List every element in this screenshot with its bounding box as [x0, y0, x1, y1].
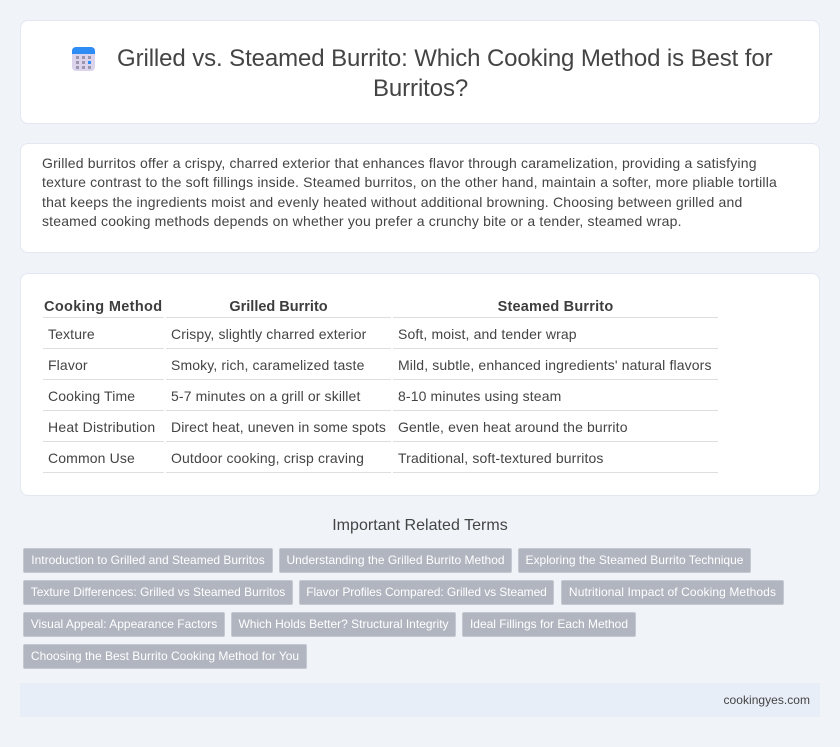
panel: related term tags — [23, 548, 784, 669]
tag — [231, 612, 456, 637]
table header: Steamed Burrito — [498, 299, 613, 315]
row: cooking time: 5-7 minutes on a grill or skillet — [171, 388, 360, 404]
footer — [20, 683, 820, 717]
tag — [462, 612, 636, 637]
tag: Exploring the Steamed Burrito Technique — [526, 553, 743, 567]
tag — [23, 644, 307, 669]
panel: comparison table — [20, 273, 820, 496]
tag: Flavor Profiles Compared: Grilled vs Steamed — [306, 585, 547, 599]
intro paragraph: that keeps the ingredients moist and evenly heated without additional browning. Choosing between grilled and — [42, 194, 742, 210]
row: cooking time — [48, 388, 561, 404]
footer source: cookingyes.com — [724, 693, 810, 707]
row: flavor: Mild, subtle, enhanced ingredients' natural flavors — [398, 357, 712, 373]
tag — [561, 580, 784, 605]
tag: Texture Differences: Grilled vs Steamed Burritos — [31, 585, 285, 599]
row: cooking time: 8-10 minutes using steam — [398, 388, 561, 404]
tag: Nutritional Impact of Cooking Methods — [569, 585, 776, 599]
panel: title card: Burritos? — [373, 75, 468, 102]
row: common use: Outdoor cooking, crisp craving — [171, 450, 364, 466]
intro paragraph: texture contrast to the soft fillings inside. Steamed burritos, on the other hand, maintain a softer, more pliable tortilla — [42, 174, 777, 190]
tag — [23, 580, 293, 605]
tag: Which Holds Better? Structural Integrity — [238, 617, 449, 631]
panel: title card: Grilled vs. Steamed Burrito: Which Cooking Method is Best for — [117, 45, 772, 72]
intro paragraph — [42, 155, 777, 229]
tag — [23, 612, 225, 637]
tag — [23, 548, 273, 573]
row: heat distribution — [48, 419, 628, 435]
tag — [299, 580, 554, 605]
row: texture: Soft, moist, and tender wrap — [398, 326, 577, 342]
tag: Ideal Fillings for Each Method — [470, 617, 628, 631]
row: flavor — [48, 357, 712, 373]
tag: Introduction to Grilled and Steamed Burritos — [31, 553, 265, 567]
row: common use: Traditional, soft-textured burritos — [398, 450, 604, 466]
tag — [518, 548, 751, 573]
row: texture — [48, 326, 577, 342]
table header: Cooking Method — [44, 299, 162, 315]
row: flavor: Flavor — [48, 357, 88, 373]
row: texture: Texture — [48, 326, 95, 342]
row: common use — [48, 450, 604, 466]
table header: Grilled Burrito — [229, 299, 328, 315]
row: texture: Crispy, slightly charred exterior — [171, 326, 366, 342]
row: heat distribution: Direct heat, uneven in some spots — [171, 419, 386, 435]
intro paragraph: steamed cooking methods depends on whether you prefer a crunchy bite or a tender, steamed wrap. — [42, 213, 682, 229]
table header — [44, 299, 613, 315]
panel: title card — [20, 20, 820, 124]
row: heat distribution: Heat Distribution — [48, 419, 155, 435]
row: common use: Common Use — [48, 450, 135, 466]
row: flavor: Smoky, rich, caramelized taste — [171, 357, 364, 373]
panel: introduction text — [20, 143, 820, 253]
intro paragraph: Grilled burritos offer a crispy, charred exterior that enhances flavor through caramelization, providing a satisfying — [42, 155, 757, 171]
icon: calendar — [72, 47, 95, 71]
heading: important related terms: Important Related Terms — [332, 517, 508, 534]
row: heat distribution: Gentle, even heat around the burrito — [398, 419, 628, 435]
row: cooking time: Cooking Time — [48, 388, 135, 404]
tag — [279, 548, 512, 573]
tag: Understanding the Grilled Burrito Method — [286, 553, 505, 567]
title — [117, 45, 772, 102]
tag: Visual Appeal: Appearance Factors — [31, 617, 217, 631]
tag: Choosing the Best Burrito Cooking Method for You — [31, 649, 299, 663]
